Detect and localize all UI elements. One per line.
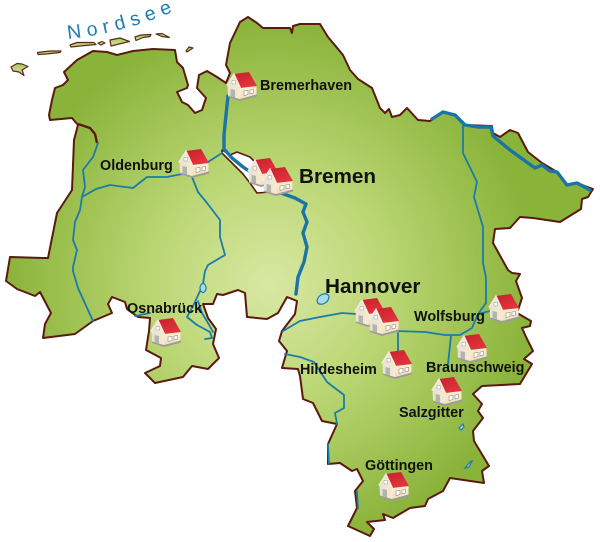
city: Wolfsburg: Wolfsburg (414, 309, 485, 325)
city: Salzgitter (399, 377, 464, 421)
city: Salzgitter: Salzgitter (399, 405, 464, 421)
city: Oldenburg (100, 149, 209, 178)
Ems estuary border (78, 124, 97, 143)
East Frisian islands (11, 34, 193, 76)
city: Braunschweig (426, 334, 524, 376)
city: Göttingen (365, 458, 433, 501)
river Elbe (432, 112, 590, 190)
city: Bremen: Bremen (299, 165, 376, 188)
city: Oldenburg: Oldenburg (100, 158, 173, 174)
city: Hannover: Hannover (325, 275, 420, 298)
city: Hannover (325, 275, 420, 336)
city: Göttingen: Göttingen (365, 458, 433, 474)
lakes (200, 284, 472, 468)
city: Bremen (248, 158, 376, 196)
city: Hildesheim: Hildesheim (300, 362, 377, 378)
thin rivers (73, 126, 490, 508)
city: Osnabrück: Osnabrück (127, 301, 203, 317)
city: Bremerhaven (227, 72, 352, 101)
Bremen cut-out (222, 150, 270, 193)
river Weser (224, 96, 307, 294)
city: Bremerhaven: Bremerhaven (260, 78, 352, 94)
city: Braunschweig: Braunschweig (426, 360, 524, 376)
city: Wolfsburg (414, 294, 519, 325)
city: Osnabrück (127, 301, 203, 347)
city: Hildesheim (300, 350, 412, 379)
